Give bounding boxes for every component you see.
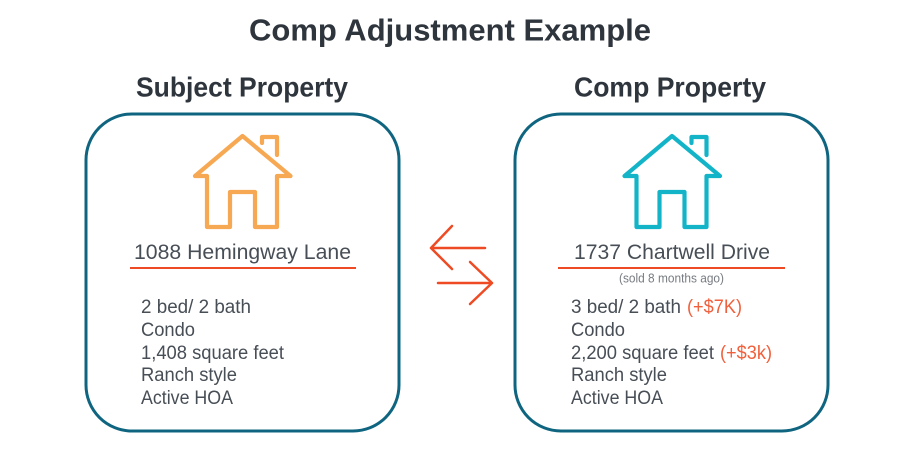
property details: Active HOA	[571, 388, 663, 409]
property details: 1,408 square feet	[141, 343, 285, 364]
property details: Condo	[141, 320, 195, 341]
property details: 3 bed/ 2 bath	[571, 297, 681, 318]
property details	[571, 297, 772, 409]
property details: (+$7K)	[687, 297, 742, 318]
address: 1088 Hemingway Lane	[134, 241, 351, 264]
panel: subject property	[86, 114, 399, 431]
address: 1737 Chartwell Drive	[574, 241, 770, 264]
arrow: right	[438, 262, 492, 304]
property details: (+$3k)	[720, 343, 772, 364]
property details: Ranch style	[571, 365, 667, 386]
icon: teal house	[624, 136, 720, 227]
heading: subject property: Subject Property	[136, 72, 348, 102]
panel: comp property	[515, 114, 828, 431]
property details: Ranch style	[141, 365, 237, 386]
arrow: left	[431, 226, 485, 269]
property details: 2 bed/ 2 bath	[141, 297, 251, 318]
icon: orange house	[195, 136, 290, 227]
property details: Active HOA	[141, 388, 233, 409]
heading: comp property: Comp Property	[574, 72, 766, 102]
property details: 2,200 square feet	[571, 343, 715, 364]
sold note: (sold 8 months ago)	[619, 272, 724, 286]
address underline	[130, 267, 356, 269]
property details	[141, 297, 285, 409]
address underline	[558, 267, 785, 269]
title: Comp Adjustment Example	[249, 12, 651, 48]
property details: Condo	[571, 320, 625, 341]
